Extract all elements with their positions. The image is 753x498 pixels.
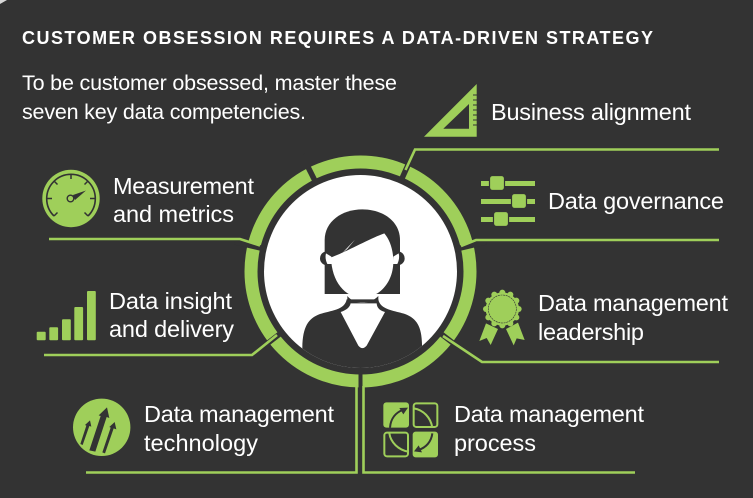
icon: process cycle: [383, 402, 438, 457]
label: business alignment: Business alignment: [491, 99, 691, 125]
icon: arrows circle: [73, 399, 130, 456]
label: measurement and metrics: and metrics: [113, 201, 234, 227]
label: data management process: Data management: [454, 401, 644, 427]
label: data management technology: Data management: [144, 401, 334, 427]
label: data insight and delivery: and delivery: [109, 316, 234, 342]
title: CUSTOMER OBSESSION REQUIRES A DATA-DRIVEN STRATEGY: [22, 28, 653, 48]
connector: data management process: [364, 386, 635, 472]
label: data management technology: technology: [144, 430, 258, 456]
label: data insight and delivery: [109, 288, 234, 342]
icon: bar chart: [37, 291, 96, 340]
label: data management technology: [144, 401, 334, 456]
icon: ruler triangle: [424, 84, 477, 137]
icon: medal: [479, 290, 525, 345]
intro text: [22, 71, 397, 124]
label: data insight and delivery: Data insight: [109, 288, 232, 314]
intro text: To be customer obsessed, master these: [22, 71, 397, 95]
label: data management leadership: [538, 290, 728, 345]
person portrait: [264, 175, 457, 380]
label: data management leadership: Data management: [538, 290, 728, 316]
connector: measurement and metrics: [49, 239, 260, 246]
connector: data governance: [461, 240, 719, 246]
label: measurement and metrics: [113, 173, 254, 227]
connector: data insight and delivery: [44, 335, 277, 355]
label: measurement and metrics: Measurement: [113, 173, 254, 199]
central ring: [235, 155, 486, 395]
intro text: seven key data competencies.: [22, 100, 306, 124]
connector: data management technology: [86, 386, 356, 472]
label: data management leadership: leadership: [538, 319, 644, 345]
label: data management process: process: [454, 430, 536, 456]
label: data management process: [454, 401, 644, 456]
label: data governance: Data governance: [548, 188, 724, 214]
connector: business alignment: [406, 150, 719, 170]
icon: gauge: [42, 170, 100, 227]
connector: data management leadership: [443, 336, 719, 362]
icon: sliders: [481, 176, 535, 226]
